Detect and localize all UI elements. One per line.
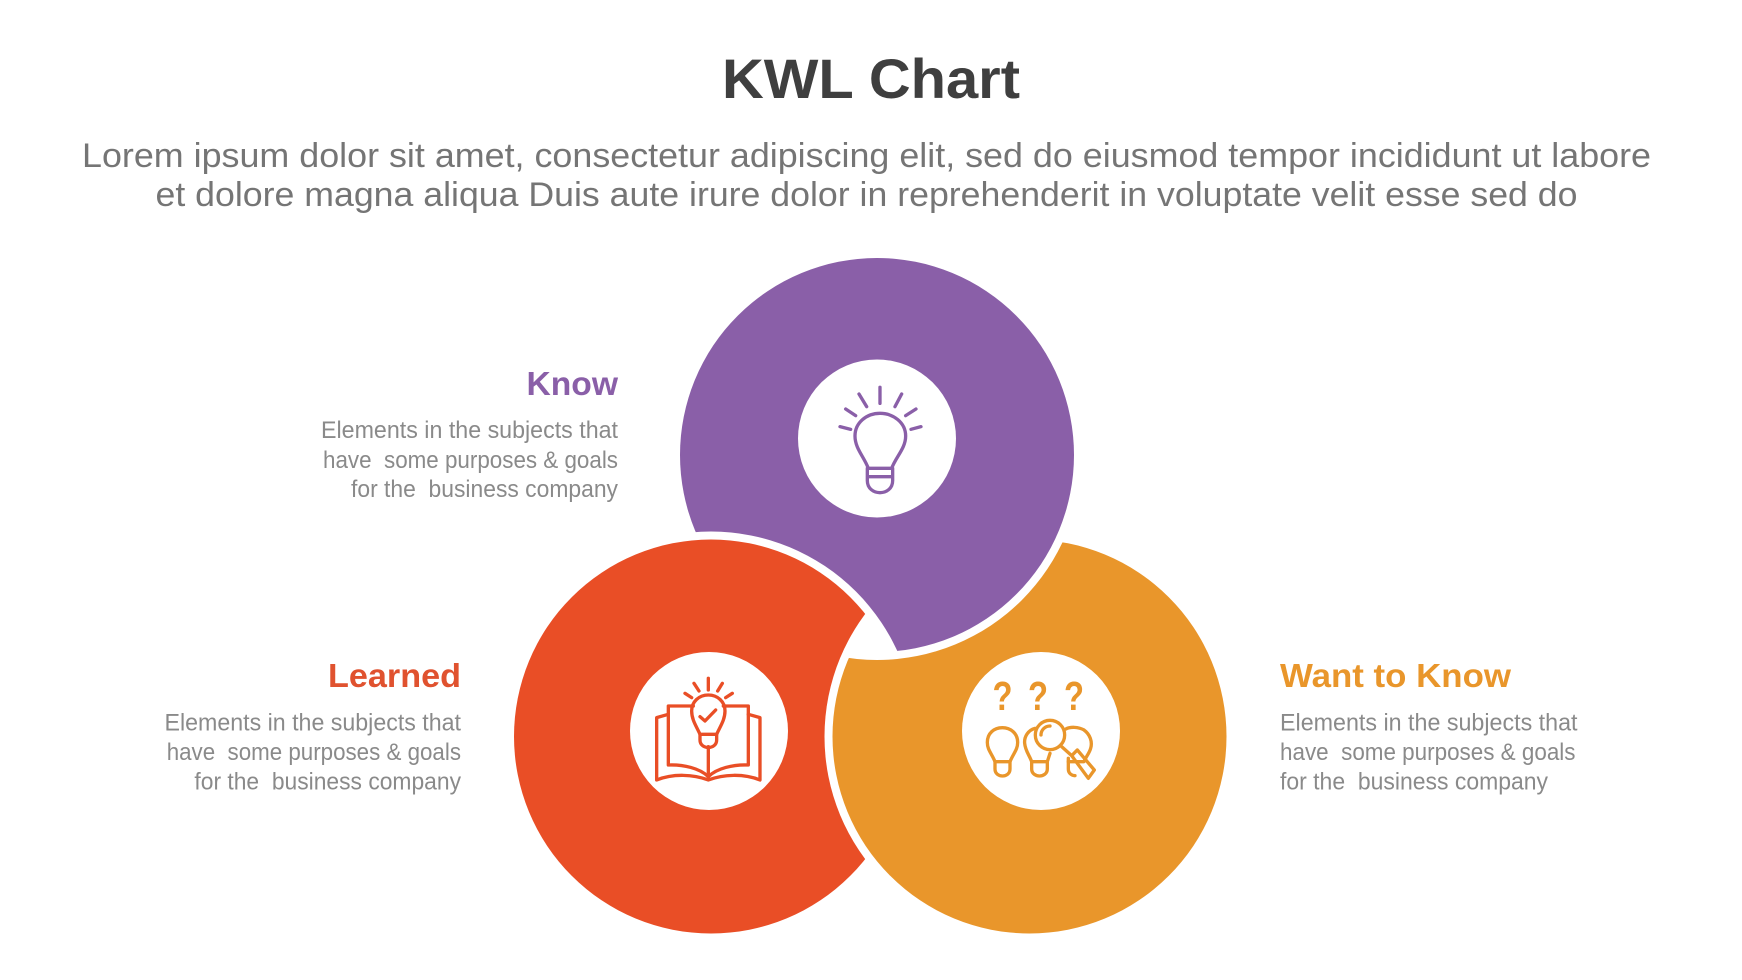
text block: learned (164, 657, 461, 796)
text block: want to know: have some purposes & goals (1280, 739, 1576, 766)
icon: want to know bulbs and magnifier: ? (1028, 673, 1048, 719)
text block: learned: for the business company (194, 768, 461, 796)
text block: want to know: Elements in the subjects that (1280, 710, 1578, 736)
subtitle text (82, 137, 1651, 214)
text block: want to know: for the business company (1280, 768, 1548, 796)
panel: know circle (680, 258, 1074, 652)
text block: know: have some purposes & goals (323, 447, 618, 474)
icon: know lightbulb (798, 360, 956, 518)
text block: want to know (1280, 657, 1578, 796)
icon: learned book with bulb (630, 652, 788, 810)
panel: learned circle (514, 540, 866, 934)
icon: want to know bulbs and magnifier (962, 652, 1120, 810)
text block: want to know: Want to Know (1280, 657, 1511, 694)
text block: know (321, 365, 618, 503)
text block: know: for the business company (351, 476, 618, 503)
text block: learned: have some purposes & goals (167, 739, 461, 766)
title: KWL Chart (722, 47, 1020, 110)
text block: learned: Learned (328, 657, 461, 694)
subtitle text: et dolore magna aliqua Duis aute irure dolor in reprehenderit in voluptate velit esse sed do (156, 176, 1578, 214)
subtitle text: Lorem ipsum dolor sit amet, consectetur adipiscing elit, sed do eiusmod tempor incididunt ut labore (82, 137, 1651, 175)
text block: learned: Elements in the subjects that (164, 710, 461, 736)
icon: want to know bulbs and magnifier: ? (1064, 673, 1084, 719)
text block: know: Elements in the subjects that (321, 417, 618, 444)
text block: know: Know (526, 365, 618, 402)
panel: want to know circle (832, 540, 1226, 934)
icon: want to know bulbs and magnifier: ? (992, 673, 1012, 719)
